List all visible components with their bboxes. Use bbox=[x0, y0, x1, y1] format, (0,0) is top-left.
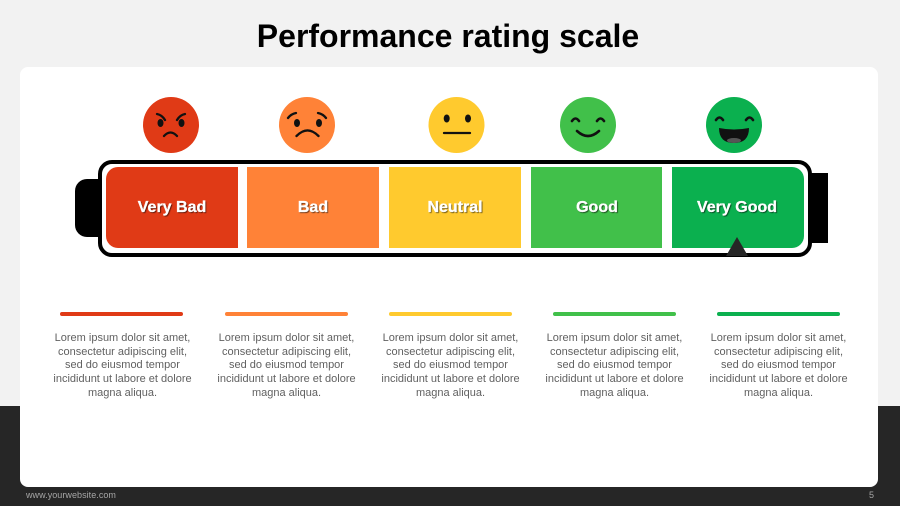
text: bad: incididunt ut labore et dolore bbox=[217, 373, 356, 385]
text: very bad: incididunt ut labore et dolore bbox=[53, 373, 192, 385]
text: bad: Lorem ipsum dolor sit amet, bbox=[219, 332, 354, 344]
label: very good: Very Good bbox=[697, 199, 777, 216]
footer website: www.yourwebsite.com bbox=[26, 490, 116, 500]
icon: laughing face bbox=[706, 97, 762, 153]
text: good: magna aliqua. bbox=[580, 387, 649, 399]
battery right terminal bbox=[804, 173, 828, 243]
rule: very good bbox=[717, 312, 840, 316]
rule: neutral bbox=[389, 312, 512, 316]
text: good: consectetur adipiscing elit, bbox=[550, 346, 679, 358]
text: neutral: consectetur adipiscing elit, bbox=[386, 346, 515, 358]
marker triangle bbox=[726, 237, 748, 256]
segment: bad bbox=[247, 167, 379, 248]
text: very bad: Lorem ipsum dolor sit amet, bbox=[55, 332, 190, 344]
text: neutral: Lorem ipsum dolor sit amet, bbox=[383, 332, 518, 344]
battery outline bbox=[98, 160, 812, 257]
rule: good bbox=[553, 312, 676, 316]
rule: bad bbox=[225, 312, 348, 316]
text: very good: sed do eiusmod tempor bbox=[721, 359, 836, 371]
text: good: Lorem ipsum dolor sit amet, bbox=[547, 332, 682, 344]
footer band bbox=[0, 406, 900, 506]
text: bad: magna aliqua. bbox=[252, 387, 321, 399]
title: Performance rating scale bbox=[257, 18, 639, 54]
segment: good bbox=[531, 167, 662, 248]
icon: neutral face bbox=[428, 97, 484, 153]
text: neutral bbox=[381, 332, 520, 399]
text: very bad: magna aliqua. bbox=[88, 387, 157, 399]
segment: very good bbox=[672, 167, 804, 248]
segment: very bad bbox=[106, 167, 238, 248]
label: neutral: Neutral bbox=[427, 199, 483, 216]
text: good bbox=[545, 332, 684, 399]
rule: very bad bbox=[60, 312, 183, 316]
page number: 5 bbox=[869, 490, 874, 500]
text: very bad bbox=[53, 332, 192, 399]
text: very bad: sed do eiusmod tempor bbox=[65, 359, 180, 371]
text: very good: incididunt ut labore et dolore bbox=[709, 373, 848, 385]
label: bad: Bad bbox=[298, 199, 328, 216]
text: bad: consectetur adipiscing elit, bbox=[222, 346, 351, 358]
text: neutral: magna aliqua. bbox=[416, 387, 485, 399]
segment: neutral bbox=[389, 167, 521, 248]
battery left cap bbox=[75, 179, 105, 237]
text: good: sed do eiusmod tempor bbox=[557, 359, 672, 371]
rating scale battery bbox=[75, 160, 828, 257]
icon: angry face bbox=[143, 97, 199, 153]
text: neutral: sed do eiusmod tempor bbox=[393, 359, 508, 371]
icon: smiling face bbox=[560, 97, 616, 153]
text: good: incididunt ut labore et dolore bbox=[545, 373, 684, 385]
label: very bad: Very Bad bbox=[138, 199, 206, 216]
label: good: Good bbox=[576, 199, 618, 216]
text: bad bbox=[217, 332, 356, 399]
text: very good: magna aliqua. bbox=[744, 387, 813, 399]
text: very good bbox=[709, 332, 848, 399]
white content panel bbox=[20, 67, 878, 487]
text: very good: Lorem ipsum dolor sit amet, bbox=[711, 332, 846, 344]
text: bad: sed do eiusmod tempor bbox=[229, 359, 344, 371]
text: very good: consectetur adipiscing elit, bbox=[714, 346, 843, 358]
text: very bad: consectetur adipiscing elit, bbox=[58, 346, 187, 358]
text: neutral: incididunt ut labore et dolore bbox=[381, 373, 520, 385]
icon: sad face bbox=[279, 97, 335, 153]
